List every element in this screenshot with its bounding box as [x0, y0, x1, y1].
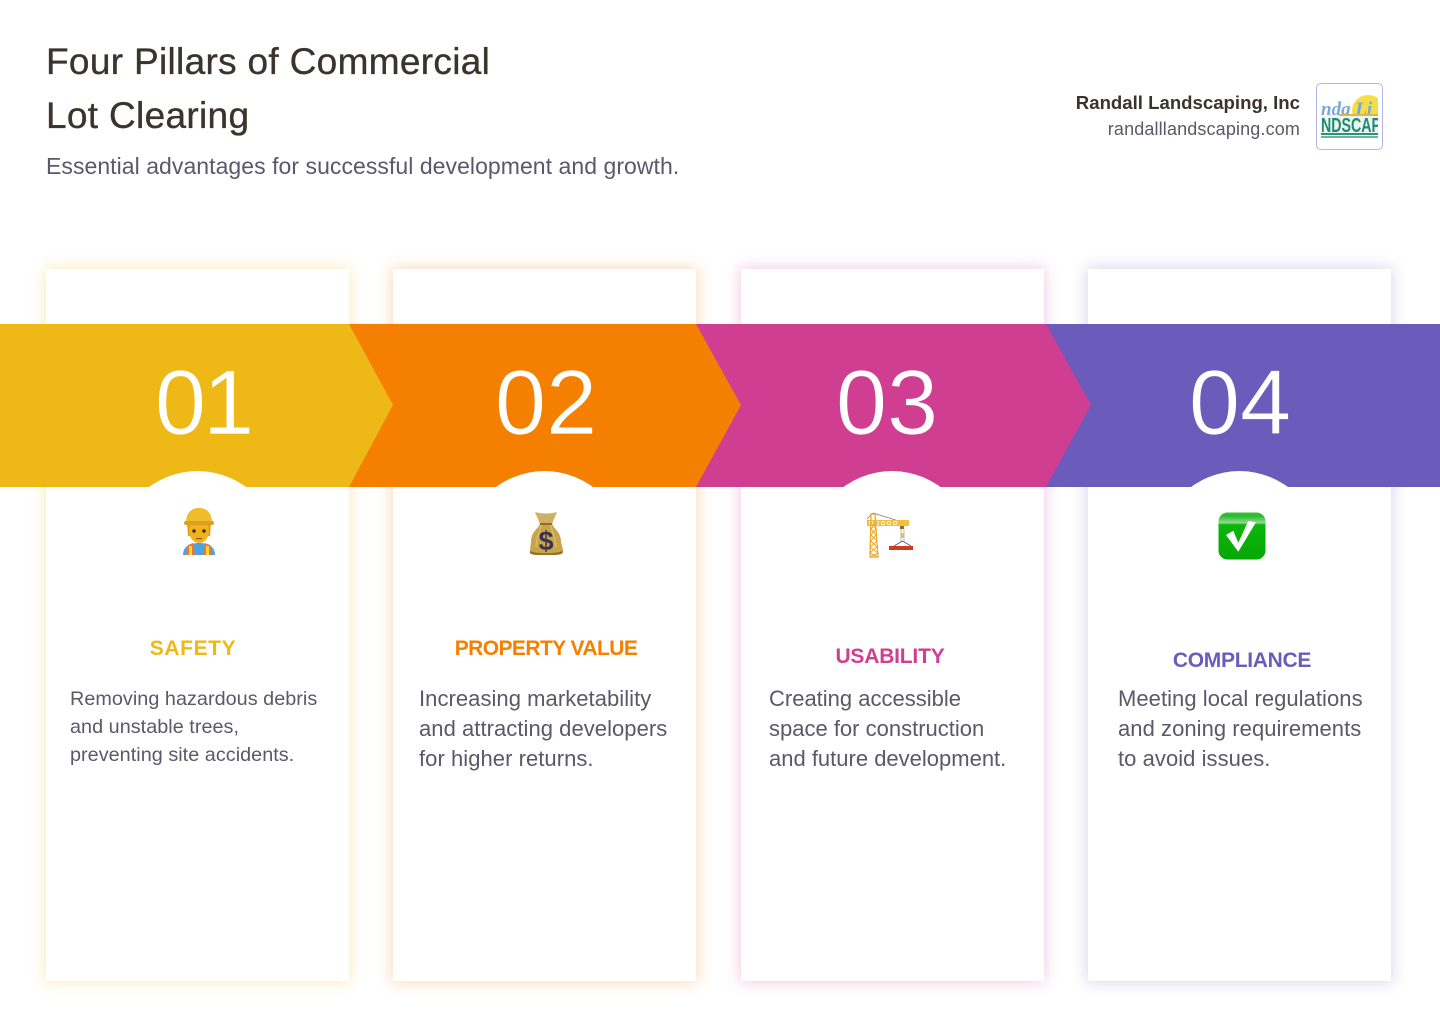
card 2 — [393, 269, 696, 981]
card 1 — [46, 269, 349, 981]
heading: safety: SAFETY — [150, 637, 236, 660]
text: usability: space for construction — [769, 716, 984, 741]
text: compliance: to avoid issues. — [1118, 746, 1270, 771]
heading: usability: USABILITY — [835, 645, 945, 668]
text: compliance: and zoning requirements — [1118, 716, 1361, 741]
heading: property value: PROPERTY VALUE — [455, 637, 637, 660]
icon: money bag — [530, 512, 563, 556]
title: Lot Clearing — [46, 95, 249, 136]
company logo: nda Li — [1321, 99, 1373, 120]
chevron band — [0, 324, 1440, 487]
company name: Randall Landscaping, Inc — [1076, 92, 1300, 113]
text: safety: preventing site accidents. — [70, 744, 294, 766]
subtitle: Essential advantages for successful development and growth. — [46, 153, 679, 179]
text: safety: Removing hazardous debris — [70, 688, 317, 710]
text: property value: and attracting developers — [419, 716, 667, 741]
text: safety — [70, 688, 317, 766]
number 03: 03 — [836, 352, 938, 454]
number 01: 01 — [155, 352, 251, 454]
text: usability: Creating accessible — [769, 686, 961, 711]
icon: construction worker — [183, 508, 215, 555]
heading: compliance: COMPLIANCE — [1173, 649, 1311, 672]
text: property value: Increasing marketability — [419, 686, 651, 711]
text: usability — [769, 686, 1006, 771]
text: compliance — [1118, 686, 1363, 771]
number 02: 02 — [495, 352, 597, 454]
text: compliance: Meeting local regulations — [1118, 686, 1363, 711]
title: Four Pillars of Commercial — [46, 41, 490, 82]
icon: check mark — [1218, 512, 1266, 560]
card 3 — [741, 269, 1044, 981]
text: usability: and future development. — [769, 746, 1006, 771]
text: safety: and unstable trees, — [70, 716, 239, 738]
number 04: 04 — [1189, 352, 1291, 454]
icon: money bag: $ — [538, 526, 554, 556]
text: property value — [419, 686, 667, 771]
company website: randalllandscaping.com — [1108, 119, 1300, 139]
icon: building crane — [866, 512, 913, 558]
company logo — [1316, 83, 1383, 150]
text: property value: for higher returns. — [419, 746, 594, 771]
card 4 — [1088, 269, 1391, 981]
title — [46, 41, 490, 136]
